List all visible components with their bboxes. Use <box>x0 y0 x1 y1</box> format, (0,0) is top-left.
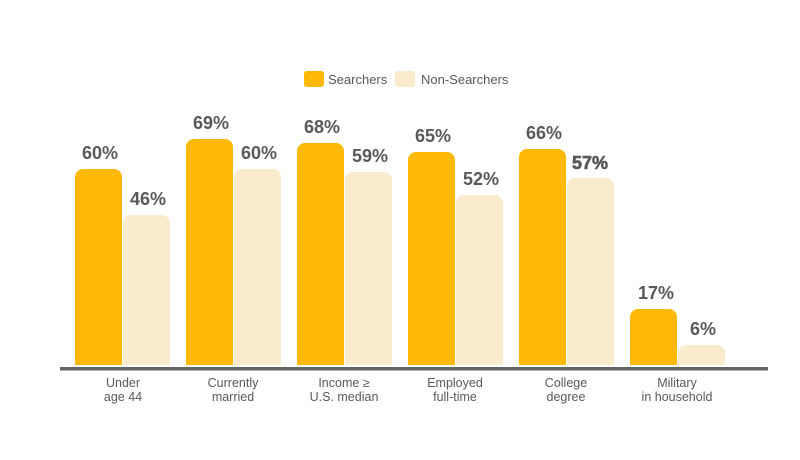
group: employed full-time: full-time <box>433 390 477 404</box>
group: college degree: 57% <box>572 153 608 173</box>
legend: Searchers <box>328 72 388 87</box>
group: college degree: College <box>545 376 587 390</box>
group: income at or above U.S. median: U.S. median <box>310 390 378 404</box>
group: income at or above U.S. median: 68% <box>304 117 340 137</box>
group: employed full-time: 65% <box>415 126 451 146</box>
group: income at or above U.S. median <box>297 117 392 404</box>
axis line <box>60 367 768 370</box>
legend: Non-Searchers <box>421 72 509 87</box>
group: college degree: 66% <box>526 123 562 143</box>
group: under age 44: 46% <box>130 189 166 209</box>
group: under age 44: Under <box>106 376 140 390</box>
group: currently married <box>186 113 281 404</box>
group: under age 44: 60% <box>82 143 118 163</box>
group: college degree: degree <box>547 390 586 404</box>
group: college degree <box>519 123 614 404</box>
group: employed full-time: 52% <box>463 169 499 189</box>
group: military in household: 17% <box>638 283 674 303</box>
group: currently married: married <box>212 390 254 404</box>
group: currently married: 69% <box>193 113 229 133</box>
group: military in household: Military <box>657 376 698 390</box>
group: currently married: Currently <box>208 376 259 390</box>
group: under age 44: age 44 <box>104 390 142 404</box>
group: income at or above U.S. median: Income ≥ <box>318 376 370 390</box>
group: income at or above U.S. median: 59% <box>352 146 388 166</box>
group: employed full-time <box>408 126 503 404</box>
group: employed full-time: Employed <box>427 376 483 390</box>
group: currently married: 60% <box>241 143 277 163</box>
group: military in household: 6% <box>690 319 716 339</box>
group: under age 44 <box>75 143 170 404</box>
group: military in household: in household <box>642 390 712 404</box>
group: military in household <box>630 283 725 404</box>
legend <box>304 71 509 87</box>
